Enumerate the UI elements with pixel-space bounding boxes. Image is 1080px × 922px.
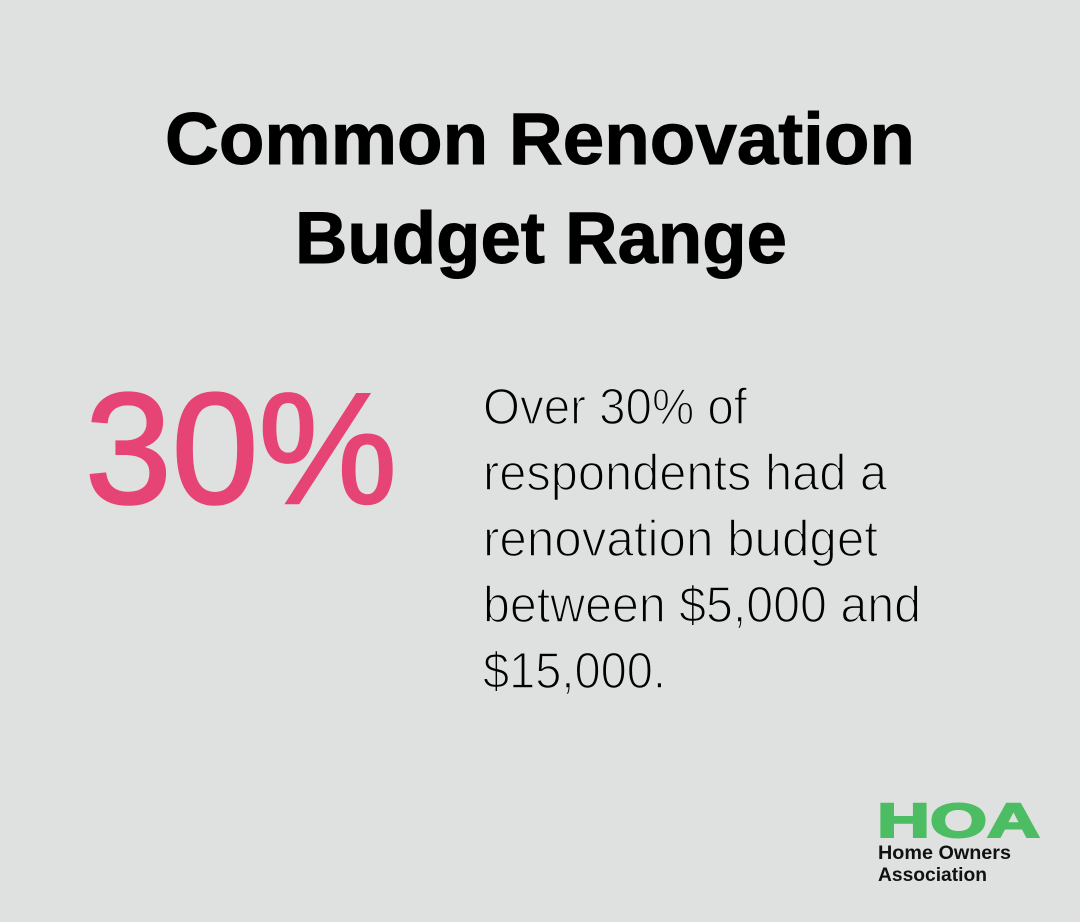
- logo: HOA Home Owners Association: [877, 795, 1040, 886]
- logo wordmark: [878, 843, 1011, 886]
- description text: [483, 378, 921, 699]
- logo wordmark: Association: [878, 865, 987, 886]
- title: [165, 99, 915, 279]
- description text: respondents had a: [483, 444, 888, 501]
- logo wordmark: Home Owners: [878, 843, 1011, 864]
- big statistic: 30%: 30%: [85, 361, 397, 537]
- description text: Over 30% of: [483, 378, 748, 435]
- description text: $15,000.: [483, 642, 666, 699]
- title: Budget Range: [295, 198, 787, 279]
- description text: renovation budget: [483, 510, 878, 567]
- logo mark: HOA: [877, 795, 1040, 848]
- description text: between $5,000 and: [483, 576, 921, 633]
- title: Common Renovation: [165, 99, 915, 180]
